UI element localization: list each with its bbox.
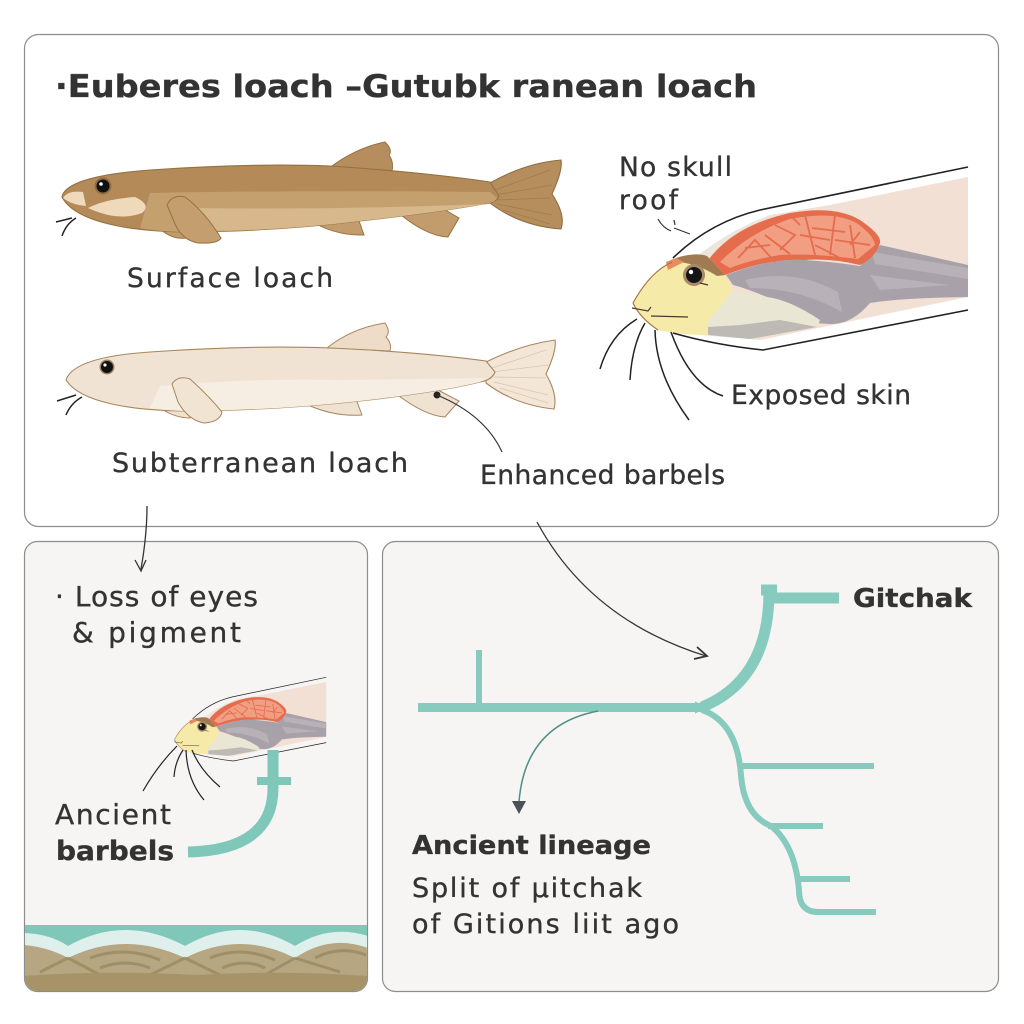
- arrow: top panel to loss of eyes panel: [135, 506, 147, 571]
- label: surface loach: Surface loach: [127, 263, 333, 294]
- text: loss of eyes and pigment: & pigment: [72, 616, 241, 649]
- arrow: lineage split to ancient lineage: [512, 711, 598, 814]
- title: ·Euberes loach –Gutubk ranean loach: [55, 69, 757, 105]
- panel: phylogeny: [382, 542, 998, 992]
- callout: enhanced barbels pointer: [434, 392, 502, 452]
- label: no skull roof: [619, 152, 732, 234]
- chart: lineage tree: [418, 590, 876, 912]
- text: loss of eyes and pigment: · Loss of eyes: [55, 580, 258, 613]
- text: loss of eyes and pigment: [55, 580, 258, 649]
- label: enhanced barbels: Enhanced barbels: [480, 460, 725, 491]
- label: subterranean loach: Subterranean loach: [112, 448, 408, 479]
- illustration: water and sediment layers: [24, 925, 368, 992]
- icon: small head anatomy: [143, 677, 326, 800]
- label: ancient barbels: barbels: [56, 836, 174, 867]
- panel: loach comparison: [24, 34, 998, 526]
- arrow: top panel to phylogeny panel: [537, 522, 707, 659]
- illustration: head anatomy: [600, 167, 968, 420]
- label: exposed skin: Exposed skin: [731, 380, 911, 411]
- label: ancient barbels: Ancient: [55, 798, 171, 831]
- connector: teal stem: [188, 750, 273, 852]
- text: ancient lineage: [412, 831, 679, 940]
- text: ancient lineage: Ancient lineage: [412, 831, 651, 861]
- text: ancient lineage: Split of µitchak: [412, 873, 642, 904]
- illustration: surface loach: [56, 142, 562, 243]
- label: no skull roof: No skull: [619, 152, 732, 183]
- panel: loss of eyes and pigment: [24, 542, 368, 992]
- label: ancient barbels: [55, 798, 174, 867]
- text: ancient lineage: of Gitions liit ago: [412, 909, 679, 940]
- label: no skull roof: roof: [619, 185, 679, 216]
- label: gitchak: Gitchak: [853, 584, 973, 614]
- illustration: subterranean loach: [57, 323, 555, 452]
